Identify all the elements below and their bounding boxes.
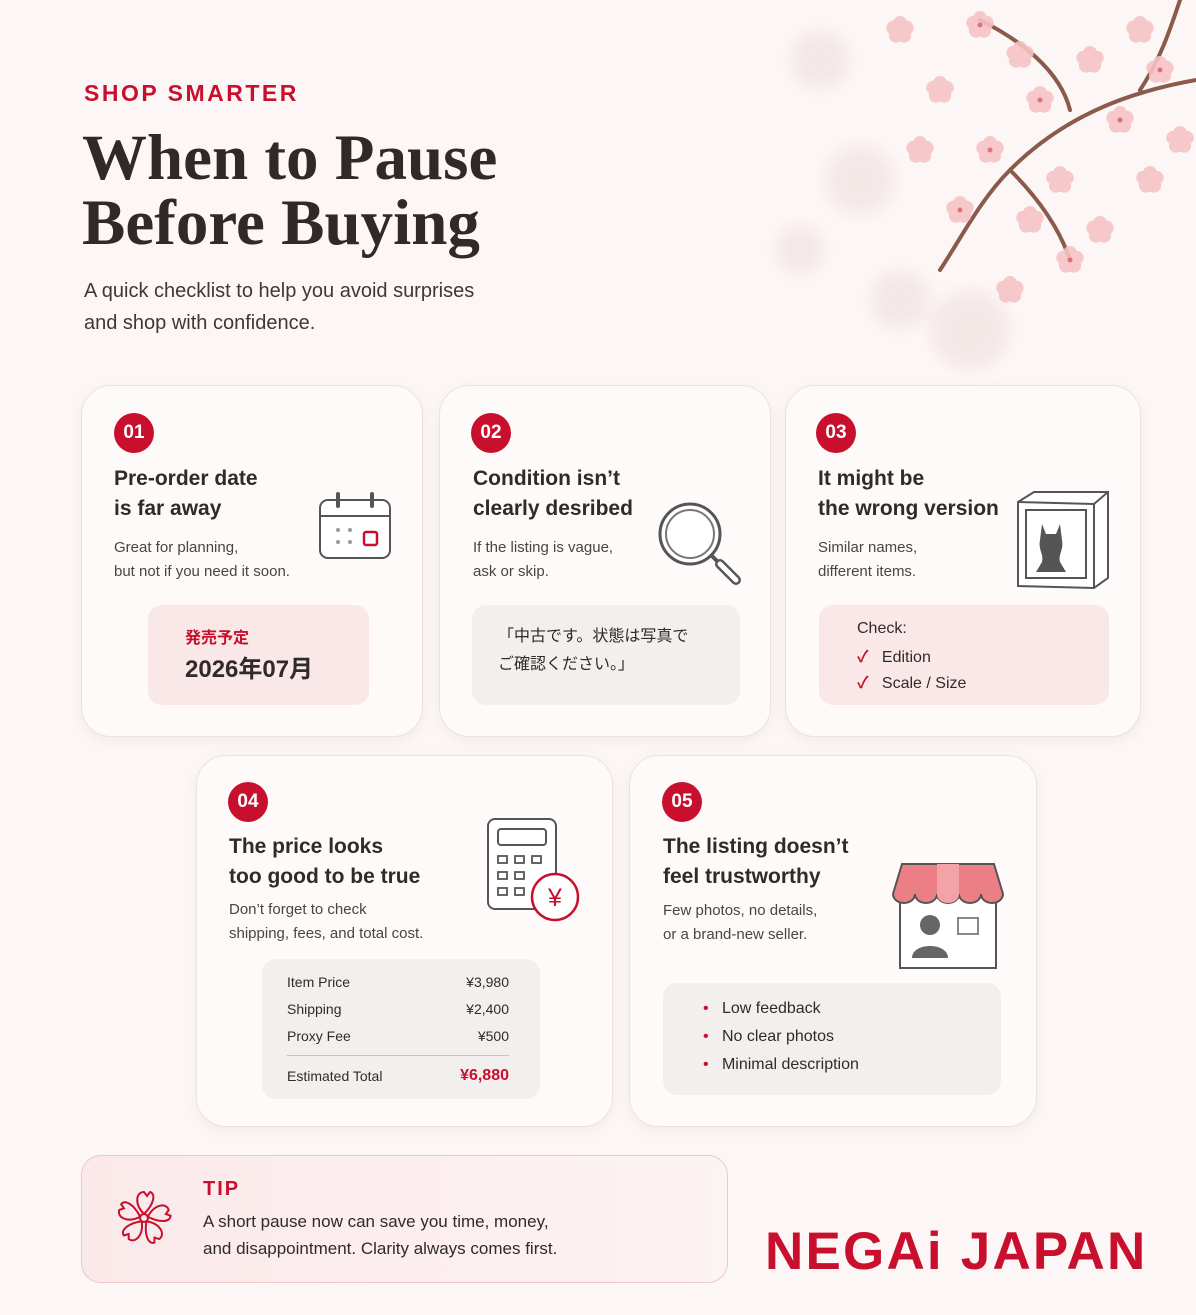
title <box>82 122 497 259</box>
quote box <box>472 605 740 705</box>
panel: 03 wrong version <box>785 385 1141 737</box>
icon: sakura flower <box>118 1190 172 1244</box>
panel: 01 pre-order: is far away <box>114 497 221 520</box>
cost table: ¥500 <box>478 1028 509 1044</box>
check box: ✓ Edition <box>857 649 931 666</box>
panel: 01 pre-order: Great for planning, <box>114 539 238 556</box>
panel: 03 wrong version: It might be <box>818 467 924 490</box>
icon: calculator with yen: ¥ <box>547 884 562 912</box>
panel: 02 condition: Condition isn’t <box>473 467 620 490</box>
check box: Check: <box>857 620 907 637</box>
panel: 02 condition: If the listing is vague, <box>473 539 613 556</box>
panel: 05 trustworthy: The listing doesn’t <box>663 835 849 858</box>
panel: 04 price: The price looks <box>229 835 383 858</box>
panel: 04 price: 04 <box>237 791 259 812</box>
quote box: 「中古です。状態は写真で <box>498 628 688 645</box>
panel: 01 pre-order: Pre-order date <box>114 467 258 490</box>
panel: 04 price: too good to be true <box>229 865 420 888</box>
quote box: ご確認ください。」 <box>498 656 634 673</box>
panel: 03 wrong version: Similar names, <box>818 539 917 556</box>
icon: calendar <box>319 492 391 559</box>
cost table: Shipping <box>287 1001 342 1017</box>
subtitle: and shop with confidence. <box>84 312 315 334</box>
icon: magnifier <box>658 502 741 585</box>
tip callout: and disappointment. Clarity always comes first. <box>203 1239 557 1258</box>
panel: 01 pre-order: 01 <box>123 422 145 443</box>
bullet list box <box>663 983 1001 1095</box>
tip callout <box>81 1155 728 1283</box>
panel: 02 condition: 02 <box>480 422 502 443</box>
panel: 05 trustworthy: Few photos, no details, <box>663 902 817 919</box>
cost table: Item Price <box>287 974 350 990</box>
logo: NEGAI JAPAN: NEGAi JAPAN <box>765 1222 1148 1281</box>
cost table: ¥6,880 <box>460 1067 509 1084</box>
cost table: ¥3,980 <box>466 974 509 990</box>
cost table <box>262 959 540 1099</box>
icon: figure box <box>1017 491 1109 589</box>
bullet list box: • Minimal description <box>703 1056 859 1073</box>
subtitle <box>84 280 474 334</box>
cost table: Proxy Fee <box>287 1028 351 1044</box>
subtitle: A quick checklist to help you avoid surprises <box>84 280 474 302</box>
bullet list box: • Low feedback <box>703 1000 821 1017</box>
panel: 01 pre-order <box>81 385 423 737</box>
panel: 03 wrong version: the wrong version <box>818 497 999 520</box>
panel: 04 price <box>196 755 613 1127</box>
date box: 2026年07月 <box>185 656 313 683</box>
icon: calculator with yen <box>487 818 580 922</box>
panel: 04 price: shipping, fees, and total cost. <box>229 925 423 942</box>
check box <box>819 605 1109 705</box>
icon: storefront <box>892 863 1004 969</box>
title: When to Pause <box>82 122 497 194</box>
panel: 02 condition <box>439 385 771 737</box>
eyebrow: SHOP SMARTER: SHOP SMARTER <box>84 80 299 106</box>
panel: 05 trustworthy <box>629 755 1037 1127</box>
panel: 04 price: Don’t forget to check <box>229 901 367 918</box>
date box: 発売予定 <box>185 630 249 647</box>
cost table: ¥2,400 <box>466 1001 509 1017</box>
panel: 05 trustworthy: 05 <box>671 791 693 812</box>
panel: 02 condition: clearly desribed <box>473 497 633 520</box>
panel: 03 wrong version: 03 <box>825 422 847 443</box>
panel: 03 wrong version: different items. <box>818 563 916 580</box>
panel: 02 condition: ask or skip. <box>473 563 549 580</box>
panel: 05 trustworthy: or a brand-new seller. <box>663 926 807 943</box>
cost table: Estimated Total <box>287 1068 382 1084</box>
tip callout: A short pause now can save you time, money, <box>203 1212 549 1231</box>
check box: ✓ Scale / Size <box>857 675 966 692</box>
panel: 01 pre-order: but not if you need it soon. <box>114 563 290 580</box>
panel: 05 trustworthy: feel trustworthy <box>663 865 821 888</box>
cherry blossom decoration <box>777 0 1196 368</box>
title: Before Buying <box>82 187 480 259</box>
tip callout: TIP <box>203 1178 240 1200</box>
date box <box>148 605 369 705</box>
bullet list box: • No clear photos <box>703 1028 834 1045</box>
